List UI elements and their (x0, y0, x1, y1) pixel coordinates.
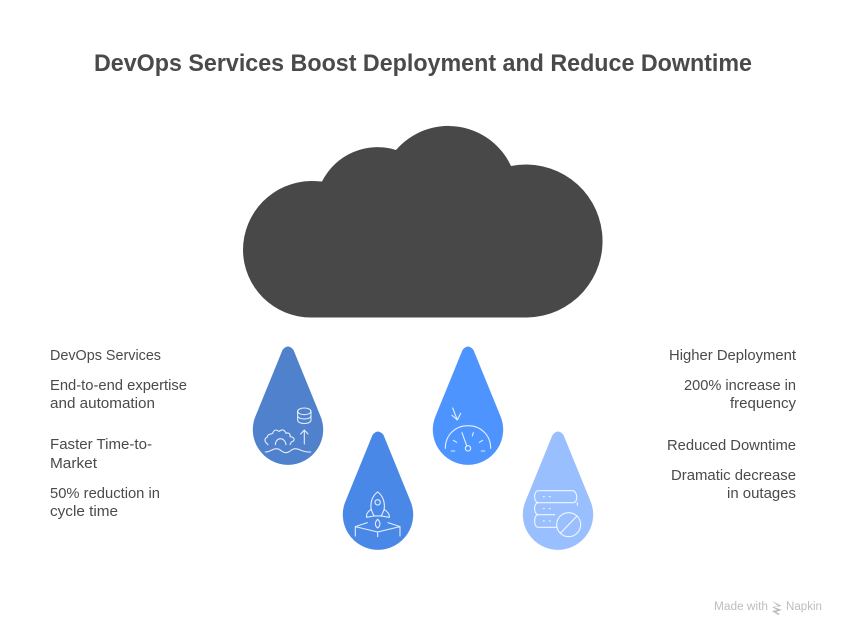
left text: Faster Time-to-Market (50, 436, 160, 520)
drop 1: automation icon (253, 346, 323, 465)
watermark (714, 601, 822, 615)
right text: Higher Deployment: 200% increase in (684, 377, 796, 394)
right text: Higher Deployment (669, 347, 797, 412)
icon: napkin logo (772, 601, 782, 615)
drop 4: server blocked icon (523, 432, 593, 550)
title: DevOps Services Boost Deployment and Reduce Downtime (94, 50, 752, 77)
left text: DevOps Services: and automation (50, 395, 155, 412)
right text: Reduced Downtime (667, 437, 796, 502)
left text: DevOps Services: End-to-end expertise (50, 377, 187, 394)
left text: Faster Time-to-Market: Market (50, 455, 98, 472)
cloud (243, 126, 603, 318)
icon: rocket launch (355, 492, 400, 537)
watermark: Napkin (786, 601, 822, 613)
watermark: Made with (714, 601, 768, 613)
icon: server stack with prohibition sign (535, 491, 581, 537)
left text: Faster Time-to-Market: 50% reduction in (50, 485, 160, 502)
drop 3: gauge icon (433, 346, 503, 465)
right text: Reduced Downtime: Reduced Downtime (667, 437, 796, 454)
icon: gear, database and arrow (265, 408, 311, 453)
icon: speedometer with down arrow (445, 408, 491, 451)
right text: Reduced Downtime: in outages (727, 485, 796, 502)
drop 2: rocket icon (343, 432, 413, 550)
left text: Faster Time-to-Market: cycle time (50, 503, 118, 520)
right text: Reduced Downtime: Dramatic decrease (671, 467, 796, 484)
left text: DevOps Services (50, 347, 187, 412)
right text: Higher Deployment: Higher Deployment (669, 347, 797, 364)
left text: DevOps Services: DevOps Services (50, 347, 161, 364)
left text: Faster Time-to-Market: Faster Time-to- (50, 436, 152, 453)
right text: Higher Deployment: frequency (730, 395, 796, 412)
